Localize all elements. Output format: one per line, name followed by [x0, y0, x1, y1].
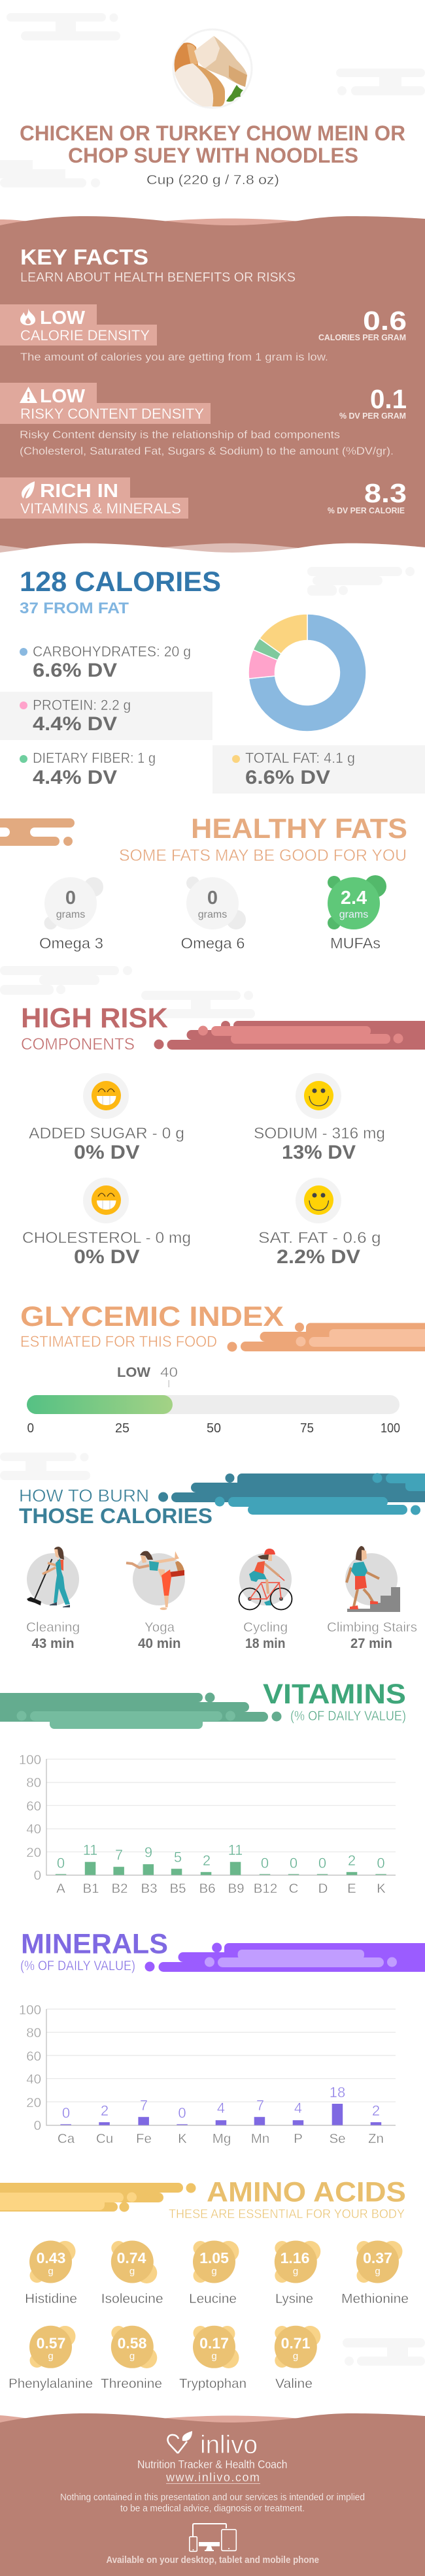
risk: added sugar: ADDED SUGAR - 0 g — [29, 1125, 184, 1142]
activity: yoga: 40 min — [138, 1636, 180, 1651]
amino: lysine: g — [293, 2266, 298, 2277]
glycemic index gauge: 0 — [27, 1421, 34, 1436]
amino: leucine: 1.05 — [199, 2249, 229, 2266]
amino: threonine: Threonine — [101, 2377, 162, 2391]
bar chart: vitamins: 20 — [26, 1845, 41, 1860]
bar chart: vitamins: 0 — [290, 1855, 298, 1871]
heading: healthy fats — [0, 813, 407, 865]
amino: methionine: g — [375, 2266, 381, 2277]
disclaimer — [60, 2492, 365, 2514]
bar chart: minerals: 2 — [372, 2102, 380, 2119]
disclaimer: Nothing contained in this presentation and our services is intended or implied — [60, 2492, 365, 2503]
heading: vitamins: (% OF DAILY VALUE) — [290, 1709, 406, 1724]
bar chart: minerals: 0 — [178, 2105, 186, 2121]
amino: tryptophan: Tryptophan — [179, 2377, 246, 2391]
fat: omega 3: Omega 3 — [39, 935, 103, 952]
activity: cleaning: 43 min — [31, 1636, 75, 1651]
fat: mufas: grams — [339, 909, 368, 920]
amino: valine: 0.71 — [281, 2334, 311, 2351]
risk: cholesterol: CHOLESTEROL - 0 mg — [22, 1229, 191, 1247]
amino: phenylalanine: Phenylalanine — [8, 2377, 93, 2391]
risk: cholesterol: 0% DV — [74, 1246, 140, 1268]
amino: isoleucine: 0.74 — [117, 2249, 146, 2266]
risk: sodium: 13% DV — [282, 1142, 356, 1163]
heading: calories — [20, 566, 221, 617]
heading: vitamins — [0, 1679, 406, 1729]
bar chart: vitamins: B2 — [111, 1881, 128, 1896]
bar chart: minerals: Mg — [212, 2131, 231, 2146]
bar chart: minerals — [19, 2003, 396, 2146]
fact: risky content density: LOW — [40, 386, 86, 407]
donut chart: macronutrients — [248, 614, 366, 732]
bar chart: vitamins: B9 — [228, 1881, 245, 1896]
bar chart: vitamins: B6 — [199, 1881, 216, 1896]
legend: dietary fiber: 4.4% DV — [33, 767, 117, 788]
bar chart: minerals: 2 — [101, 2102, 109, 2119]
amino: valine: Valine — [275, 2377, 313, 2391]
glycemic index gauge: 40 — [160, 1364, 178, 1380]
bar chart: minerals: 60 — [26, 2049, 41, 2064]
bar chart: vitamins: 0 — [57, 1855, 65, 1871]
heading: vitamins: VITAMINS — [263, 1679, 406, 1710]
legend: carbohydrates: CARBOHYDRATES: 20 g — [33, 643, 191, 660]
legend: protein — [0, 692, 212, 740]
activity: cycling: Cycling — [243, 1620, 288, 1635]
heading: how to burn those calories: THOSE CALORIES — [19, 1504, 212, 1528]
bar chart: minerals: Cu — [96, 2131, 113, 2146]
bar chart: minerals: 100 — [19, 2003, 41, 2018]
bar chart: vitamins: 40 — [26, 1822, 41, 1837]
fact: rich in vitamins and minerals: VITAMINS & MINERALS — [20, 500, 181, 517]
fat: omega 6: 0 — [207, 888, 218, 909]
heading: minerals — [20, 1929, 425, 1974]
glycemic index gauge — [27, 1364, 400, 1436]
amino: threonine: g — [129, 2351, 135, 2362]
legend: dietary fiber: DIETARY FIBER: 1 g — [33, 750, 156, 766]
amino: histidine: 0.43 — [37, 2249, 65, 2266]
bar chart: vitamins: B3 — [141, 1881, 158, 1896]
bar chart: minerals: Ca — [58, 2131, 75, 2146]
bar chart: minerals: 40 — [26, 2072, 41, 2087]
amino: methionine — [341, 2240, 409, 2306]
amino: threonine — [101, 2326, 162, 2391]
bar chart: minerals: 4 — [294, 2100, 302, 2116]
bar chart: minerals: Se — [329, 2131, 346, 2146]
amino: valine: g — [293, 2351, 298, 2362]
risk: saturated fat: SAT. FAT - 0.6 g — [258, 1229, 381, 1247]
bar chart: minerals: Fe — [136, 2131, 152, 2146]
bar chart: minerals: 7 — [140, 2097, 148, 2114]
fat: omega 6: Omega 6 — [180, 935, 245, 952]
amino: methionine: 0.37 — [363, 2249, 392, 2266]
amino: histidine: Histidine — [25, 2292, 77, 2306]
activity: cycling — [239, 1549, 292, 1651]
bar chart: vitamins: B12 — [254, 1881, 277, 1896]
fact: rich in vitamins and minerals: 8.3 — [364, 478, 407, 508]
heading: healthy fats: SOME FATS MAY BE GOOD FOR YOU — [119, 846, 407, 865]
heading: key facts — [20, 245, 296, 285]
bar chart: vitamins: C — [289, 1881, 299, 1896]
heading: amino acids: AMINO ACIDS — [207, 2177, 406, 2208]
bar chart: vitamins: 5 — [174, 1849, 182, 1865]
bar chart: vitamins: 2 — [203, 1852, 211, 1869]
activity: climbing stairs: Climbing Stairs — [327, 1620, 417, 1635]
legend: total fat — [212, 745, 425, 794]
disclaimer: to be a medical advice, diagnosis or treatment. — [120, 2503, 305, 2514]
bar chart: vitamins: 0 — [318, 1855, 326, 1871]
fat: omega 6 — [180, 877, 246, 952]
bar chart: minerals: 0 — [34, 2118, 41, 2133]
bar chart: minerals: 0 — [62, 2105, 70, 2121]
food photo: chicken pieces — [173, 29, 252, 108]
heading: key facts: LEARN ABOUT HEALTH BENEFITS OR RISKS — [20, 270, 296, 285]
bar chart: vitamins: 0 — [34, 1868, 41, 1883]
amino: valine — [275, 2326, 320, 2391]
logo: inlivo — [168, 2431, 258, 2459]
risk: added sugar: 0% DV — [74, 1142, 140, 1163]
legend: total fat: TOTAL FAT: 4.1 g — [245, 750, 355, 766]
bar chart: minerals: 80 — [26, 2025, 41, 2040]
amino: tryptophan: g — [211, 2351, 217, 2362]
heading: calories: 37 FROM FAT — [20, 600, 129, 617]
legend: carbohydrates — [20, 643, 191, 681]
bar chart: vitamins: 11 — [83, 1842, 97, 1858]
bar chart: minerals: P — [294, 2131, 303, 2146]
heading: glycemic index: GLYCEMIC INDEX — [20, 1301, 284, 1332]
bar chart: vitamins: 11 — [228, 1842, 243, 1858]
heading: minerals: (% OF DAILY VALUE) — [20, 1959, 135, 1974]
glycemic index gauge: LOW — [117, 1364, 151, 1380]
amino: isoleucine — [101, 2240, 163, 2306]
risk: sodium — [254, 1073, 385, 1163]
fact: risky content density — [0, 383, 407, 457]
fact: rich in vitamins and minerals: RICH IN — [40, 481, 118, 502]
bar chart: minerals: 18 — [330, 2084, 345, 2101]
amino: leucine: Leucine — [189, 2292, 237, 2306]
title: CHOP SUEY WITH NOODLES — [68, 144, 358, 167]
bar chart: minerals: 20 — [26, 2095, 41, 2110]
amino: histidine — [25, 2240, 77, 2306]
activity: climbing stairs — [327, 1546, 417, 1651]
heading: high risk: HIGH RISK — [21, 1003, 168, 1034]
bar chart: vitamins: E — [347, 1881, 356, 1896]
bar chart: vitamins: A — [56, 1881, 65, 1896]
amino: histidine: g — [48, 2266, 54, 2277]
bar chart: vitamins: 0 — [261, 1855, 269, 1871]
activity: yoga — [126, 1551, 185, 1651]
title: CHICKEN OR TURKEY CHOW MEIN OR — [20, 121, 405, 145]
risk: cholesterol — [22, 1178, 191, 1268]
activity: cleaning: Cleaning — [26, 1620, 80, 1635]
amino: phenylalanine: 0.57 — [37, 2334, 65, 2351]
fat: mufas: 2.4 — [341, 888, 367, 909]
fact: risky content density: (Cholesterol, Saturated Fat, Sugars & Sodium) to the amount (%DV/gr). — [20, 445, 394, 457]
risk: sodium: SODIUM - 316 mg — [254, 1125, 385, 1142]
panel: footer — [0, 2413, 425, 2576]
amino: threonine: 0.58 — [118, 2334, 147, 2351]
bar chart: vitamins: B5 — [169, 1881, 186, 1896]
heading: high risk — [21, 1003, 425, 1054]
fact: calorie density — [0, 304, 407, 363]
logo: inlivo: inlivo — [200, 2431, 258, 2459]
fat: omega 6: grams — [198, 909, 227, 920]
fact: risky content density: % DV PER GRAM — [339, 411, 406, 421]
fat: omega 3 — [39, 877, 103, 952]
fact: calorie density: CALORIES PER GRAM — [318, 332, 406, 342]
amino: phenylalanine: g — [48, 2351, 54, 2362]
risk: added sugar — [29, 1073, 184, 1163]
bar chart: minerals: K — [178, 2131, 187, 2146]
legend: total fat: 6.6% DV — [245, 767, 330, 788]
heading: healthy fats: HEALTHY FATS — [191, 813, 407, 845]
heading: amino acids: THESE ARE ESSENTIAL FOR YOUR BODY — [169, 2207, 405, 2221]
glycemic index gauge: 25 — [115, 1421, 129, 1436]
bar chart: vitamins: 2 — [348, 1852, 356, 1869]
fact: calorie density: The amount of calories you are getting from 1 gram is low. — [20, 351, 328, 363]
bar chart: vitamins: 60 — [26, 1799, 41, 1814]
fact: risky content density: Risky Content density is the relationship of bad components — [20, 428, 340, 441]
amino: tryptophan: 0.17 — [199, 2334, 229, 2351]
fat: omega 3: grams — [56, 909, 85, 920]
legend: protein: 4.4% DV — [33, 713, 117, 735]
amino: methionine: Methionine — [341, 2292, 409, 2306]
fact: calorie density: CALORIE DENSITY — [20, 327, 150, 344]
bar chart: vitamins: D — [318, 1881, 328, 1896]
fact: rich in vitamins and minerals — [0, 477, 407, 519]
heading: how to burn those calories: HOW TO BURN — [19, 1486, 149, 1505]
bar chart: vitamins: 0 — [377, 1855, 385, 1871]
risk: saturated fat — [258, 1178, 381, 1268]
glycemic index gauge: 50 — [207, 1421, 221, 1436]
bar chart: minerals: Mn — [251, 2131, 269, 2146]
heading: amino acids — [0, 2177, 406, 2221]
amino: isoleucine: Isoleucine — [101, 2292, 163, 2306]
amino: lysine: Lysine — [275, 2292, 313, 2306]
fact: calorie density: 0.6 — [363, 306, 407, 336]
legend: dietary fiber — [20, 750, 156, 788]
fact: calorie density: LOW — [40, 308, 86, 329]
bar chart: minerals: Zn — [368, 2131, 384, 2146]
heading: calories: 128 CALORIES — [20, 566, 221, 598]
bar chart: vitamins: 80 — [26, 1775, 41, 1790]
fact: rich in vitamins and minerals: % DV PER CALORIE — [328, 506, 405, 515]
risk: saturated fat: 2.2% DV — [277, 1246, 360, 1268]
panel: key facts — [0, 216, 425, 553]
bar chart: minerals: 4 — [217, 2100, 225, 2116]
amino: phenylalanine — [8, 2326, 93, 2391]
website link: www.inlivo.com — [165, 2471, 260, 2484]
tagline: Nutrition Tracker & Health Coach — [137, 2458, 288, 2471]
fat: mufas: MUFAs — [330, 935, 381, 952]
activity: cleaning — [26, 1547, 80, 1651]
title — [20, 121, 405, 167]
footer availability note: Available on your desktop, tablet and mobile phone — [106, 2555, 319, 2566]
serving size: Cup (220 g / 7.8 oz) — [146, 172, 279, 187]
amino: lysine — [275, 2240, 320, 2306]
fact: risky content density: RISKY CONTENT DENSITY — [20, 406, 204, 422]
heading: key facts: KEY FACTS — [20, 245, 148, 269]
icon: devices — [190, 2524, 236, 2551]
bar chart: vitamins: K — [377, 1881, 386, 1896]
heading: glycemic index — [20, 1301, 425, 1352]
fat: omega 3: 0 — [65, 888, 76, 909]
bar chart: vitamins: 9 — [144, 1844, 152, 1861]
fat: mufas — [328, 875, 386, 952]
glycemic index gauge: 75 — [300, 1421, 314, 1436]
heading: glycemic index: ESTIMATED FOR THIS FOOD — [20, 1333, 217, 1351]
bar chart: vitamins: B1 — [82, 1881, 99, 1896]
amino: leucine — [189, 2240, 239, 2306]
fact: risky content density: 0.1 — [370, 384, 407, 414]
legend: carbohydrates: 6.6% DV — [33, 660, 117, 681]
activity: climbing stairs: 27 min — [350, 1636, 392, 1651]
glycemic index gauge: 100 — [381, 1421, 400, 1436]
amino: tryptophan — [179, 2326, 246, 2391]
bar chart: vitamins: 100 — [19, 1752, 41, 1767]
bar chart: vitamins: 7 — [115, 1847, 123, 1863]
activity: yoga: Yoga — [144, 1620, 175, 1635]
legend: protein: PROTEIN: 2.2 g — [33, 697, 131, 713]
activity: cycling: 18 min — [245, 1636, 285, 1651]
amino: leucine: g — [211, 2266, 217, 2277]
heading: how to burn those calories — [19, 1473, 425, 1528]
bar chart: minerals: 7 — [256, 2097, 264, 2114]
amino: isoleucine: g — [129, 2266, 135, 2277]
heading: high risk: COMPONENTS — [21, 1035, 135, 1054]
bar chart: vitamins — [19, 1752, 396, 1896]
amino: lysine: 1.16 — [280, 2249, 309, 2266]
heading: minerals: MINERALS — [21, 1929, 168, 1960]
